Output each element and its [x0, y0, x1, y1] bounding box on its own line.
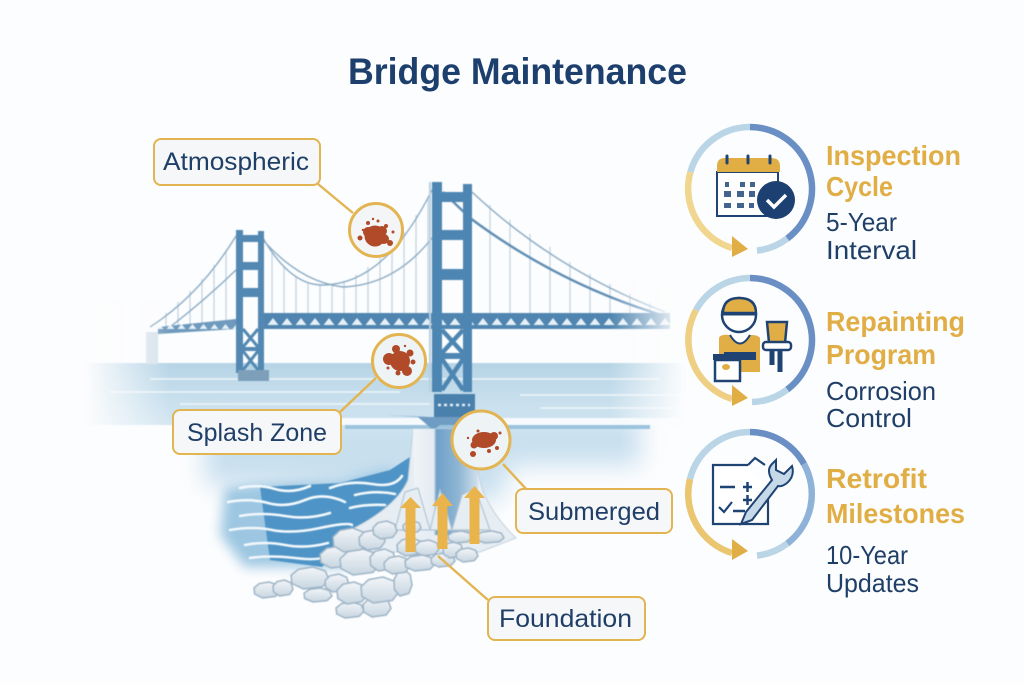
rock ridges at pier base — [395, 488, 490, 530]
bridge deck right and centre — [264, 313, 670, 329]
cycle ring — [688, 127, 812, 257]
lower water haze — [205, 415, 640, 500]
panel: retrofit milestones — [688, 432, 965, 598]
sea waves light — [220, 468, 395, 567]
icon: checklist with wrench — [713, 458, 793, 524]
rock pile — [254, 521, 504, 618]
sea waves dark — [260, 457, 410, 567]
heading — [826, 140, 961, 202]
cycle ring — [688, 278, 812, 406]
pier flared base — [340, 429, 516, 552]
small tower — [236, 230, 269, 381]
subtext — [826, 376, 936, 433]
subtext — [826, 207, 917, 265]
heading — [826, 463, 965, 529]
heading: Milestones — [826, 498, 965, 529]
corrosion circle — [350, 204, 402, 256]
illustration: suspension bridge and water — [85, 182, 685, 618]
leader line — [318, 184, 353, 213]
callout: submerged — [452, 411, 672, 533]
label text: Foundation — [499, 605, 632, 633]
heading: Cycle — [826, 171, 893, 202]
leader line — [340, 378, 376, 412]
big tower side cable — [443, 192, 665, 316]
callout: foundation — [438, 556, 645, 640]
label text: Atmospheric — [163, 148, 309, 176]
heading: Inspection — [826, 140, 961, 171]
heading: Repainting — [826, 306, 965, 337]
label text: Splash Zone — [187, 419, 327, 447]
leader line — [438, 556, 488, 600]
corrosion circle — [372, 334, 426, 388]
label box — [488, 597, 645, 640]
label box — [516, 489, 672, 533]
suspender cables — [166, 197, 650, 330]
heading — [826, 306, 965, 370]
main cables — [150, 190, 665, 327]
white water line and shore band — [340, 418, 680, 425]
upward arrows: foundation load — [400, 486, 485, 552]
heading: Program — [826, 339, 936, 370]
label box — [154, 139, 320, 185]
fade left edge — [85, 300, 170, 425]
subtext — [826, 540, 919, 598]
far water band — [85, 363, 685, 425]
far pier — [146, 332, 158, 364]
pier platform — [385, 415, 480, 430]
subtext: Corrosion — [826, 376, 936, 406]
icon: painter with spray gun — [713, 298, 791, 381]
fade right edge — [610, 280, 685, 425]
heading: Retrofit — [826, 463, 927, 494]
subtext: Interval — [826, 235, 917, 265]
blue water line — [345, 425, 650, 429]
label text: Submerged — [528, 498, 660, 526]
panel: repainting program — [688, 278, 965, 433]
corrosion circle — [452, 411, 510, 469]
title: Bridge Maintenance — [348, 51, 687, 92]
icon: calendar with check — [717, 156, 795, 219]
panel: inspection cycle — [688, 127, 961, 265]
subtext: 10-Year — [826, 540, 908, 570]
cycle ring — [688, 432, 812, 560]
pier column — [413, 429, 478, 535]
big tower — [430, 182, 475, 418]
water highlights — [110, 379, 680, 408]
leader line — [503, 464, 527, 490]
white wave crests — [228, 476, 402, 559]
subtext: 5-Year — [826, 207, 897, 237]
subtext: Updates — [826, 568, 919, 598]
subtext: Control — [826, 403, 912, 433]
callout: splash zone — [173, 334, 426, 454]
bridge deck left — [158, 319, 236, 334]
label box — [173, 410, 341, 454]
callout: atmospheric — [154, 139, 402, 256]
